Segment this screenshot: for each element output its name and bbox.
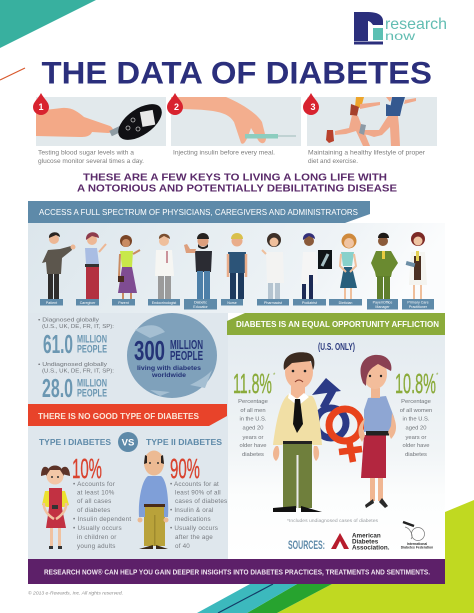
person: nurse — [228, 233, 246, 299]
person: primary care practitioner — [406, 232, 427, 299]
illustration: girl — [41, 466, 70, 549]
person: diabetes educator — [184, 233, 212, 299]
globe: 300 million people: worldwide — [151, 372, 187, 379]
subheading: A NOTORIOUS AND POTENTIALLY DEBILITATING DISEASE — [77, 183, 397, 195]
stat: diagnosed globally: 61.0 — [43, 329, 73, 359]
stat: men: years or — [243, 435, 264, 441]
heading: type I: TYPE I DIABETES — [39, 438, 112, 447]
stat: women: Percentage — [401, 399, 431, 405]
stat: women: aged 20 — [406, 426, 426, 432]
people row — [40, 232, 434, 310]
copyright: © 2013 e-Rewards, Inc. All rights reserved. — [28, 590, 123, 596]
step captions: Testing blood sugar levels with a — [38, 150, 135, 156]
stat: type I 10%: • Insulin dependent — [73, 516, 131, 523]
step captions: Injecting insulin before every meal. — [173, 150, 275, 156]
icon: number drop 2: 2 — [174, 102, 179, 112]
logo: research now: now — [385, 29, 415, 43]
globe: 300 million people: MILLION — [170, 338, 203, 352]
illustration: older man — [138, 450, 168, 549]
stat: type I 10%: in children or — [77, 534, 117, 541]
stat: women: older have — [402, 443, 430, 449]
person: payer office manager — [371, 233, 398, 299]
footnote: *Includes undiagnosed cases of diabetes — [287, 518, 378, 523]
globe: 300 million people: PEOPLE — [170, 349, 203, 363]
stat: diagnosed globally: (U.S., UK, DE, FR, IT, SP): — [42, 324, 114, 330]
stat: men: older have — [239, 443, 267, 449]
stat: undiagnosed globally — [38, 362, 114, 403]
role labels: Endocrinologist — [152, 301, 176, 305]
logo: American Diabetes Association: American — [352, 532, 381, 540]
person: dietician — [340, 234, 357, 299]
person: pharmacist — [262, 233, 284, 299]
role labels: Pharmacist — [264, 301, 282, 305]
stat: women: in the U.S. — [402, 416, 430, 422]
stat: diagnosed globally: MILLION — [77, 334, 107, 346]
icon: runners — [326, 97, 416, 146]
stat: type I 10%: of diabetes — [77, 507, 111, 514]
stat: type I 10% — [72, 453, 131, 550]
panel: step 2 insulin injection — [167, 93, 301, 146]
icon: syringe — [245, 134, 296, 138]
stat: type I 10%: young adults — [77, 543, 116, 550]
illustration: woman — [358, 355, 396, 508]
stat: diagnosed globally — [38, 318, 114, 359]
stat: men: diabetes — [242, 452, 264, 458]
stat: type I 10%: • Accounts for — [73, 481, 115, 488]
icon: versus badge: VS — [122, 438, 134, 448]
stat: men: of all men — [240, 408, 266, 414]
stat: women — [395, 368, 439, 458]
stat: type II 90%: • Accounts for at — [170, 481, 219, 488]
subheading: THESE ARE A FEW KEYS TO LIVING A LONG LIFE WITH — [83, 172, 387, 184]
stat: women: 10.8% — [395, 368, 436, 399]
globe: 300 million people — [127, 313, 217, 398]
stat: undiagnosed globally: 28.0 — [42, 373, 73, 403]
step captions: glucose monitor several times a day. — [38, 159, 144, 165]
role labels — [40, 299, 434, 310]
banner: access a full spectrum: ACCESS A FULL SPECTRUM OF PHYSICIANS, CAREGIVERS AND ADMINISTRATORS — [39, 207, 358, 217]
stat: undiagnosed globally: MILLION — [77, 378, 107, 390]
icon: arm and hand — [171, 97, 266, 144]
stat: undiagnosed globally: • Undiagnosed globally — [38, 362, 107, 368]
stat: type I 10%: • Usually occurs — [73, 525, 122, 532]
subheading — [77, 172, 397, 195]
logo: American Diabetes Association: Diabetes — [352, 538, 379, 546]
stat: women: diabetes — [405, 452, 427, 458]
role labels: Primary Care — [407, 301, 429, 305]
stat: type II 90%: of 40 — [175, 543, 190, 550]
stat: women: * — [436, 373, 439, 379]
logo: International Diabetes Federation: International — [407, 542, 427, 546]
stat: type I 10%: 10% — [72, 453, 102, 484]
logo: American Diabetes Association: Association. — [352, 544, 390, 552]
stat: women: years or — [406, 435, 427, 441]
logo: International Diabetes Federation: Diabetes Federation — [401, 546, 433, 550]
banner: no good type of diabetes: THERE IS NO GOOD TYPE OF DIABETES — [38, 412, 200, 421]
stat: type II 90% — [170, 453, 227, 550]
stat: type I 10%: at least 10% — [77, 490, 115, 496]
title: THE DATA OF DIABETES — [42, 54, 432, 90]
stat: undiagnosed globally: (U.S., UK, DE, FR, IT, SP): — [42, 368, 114, 374]
role labels: Podiatrist — [302, 301, 317, 305]
globe: 300 million people: living with diabetes — [137, 365, 202, 372]
person: parent — [118, 235, 140, 299]
logo: International Diabetes Federation — [401, 522, 433, 550]
panel backgrounds — [28, 223, 445, 559]
role labels: Caregiver — [80, 301, 96, 305]
banner: access a full spectrum — [28, 201, 370, 223]
logo: American Diabetes Association — [331, 532, 390, 552]
stat: type II 90%: least 90% of all — [175, 490, 221, 496]
banner: equal opportunity affliction: DIABETES IS AN EQUAL OPPORTUNITY AFFLICTION — [236, 320, 439, 329]
panel: step 3 exercise — [303, 93, 437, 146]
heading: U.S. only: (U.S. ONLY) — [318, 342, 355, 353]
sources: SOURCES: — [288, 540, 325, 552]
step captions: Maintaining a healthy lifestyle of proper — [308, 150, 425, 156]
banner: research now call to action — [28, 559, 445, 584]
role labels: Patient — [46, 301, 57, 305]
stat: type II 90%: • Usually occurs — [170, 525, 218, 532]
stat: undiagnosed globally: PEOPLE — [77, 388, 107, 400]
stat: diagnosed globally: • Diagnosed globally — [38, 318, 99, 324]
role labels: Manager — [375, 305, 390, 309]
globe: 300 million people: 300 — [134, 335, 165, 366]
person: patient — [42, 232, 76, 299]
role labels: Dietician — [339, 301, 352, 305]
role labels: Payer/Office — [373, 301, 392, 305]
heading: type II: TYPE II DIABETES — [146, 438, 223, 447]
banner: research now call to action: RESEARCH NOW® CAN HELP YOU GAIN DEEPER INSIGHTS INTO DIABETES PRACTICES, TREATMENTS AND SENTIMENTS. — [44, 568, 430, 576]
icon: number drop 1: 1 — [38, 102, 44, 112]
logo: research now: research — [385, 16, 447, 33]
icon: versus badge — [118, 432, 138, 452]
stat: men: in the U.S. — [239, 416, 267, 422]
step captions: diet and exercise. — [308, 159, 358, 165]
icon: glucose meter — [109, 97, 168, 147]
stat: type II 90%: • Insulin & oral — [170, 507, 214, 514]
person: endocrinologist — [155, 234, 174, 299]
stat: men: Percentage — [238, 399, 268, 405]
icon: hand with finger — [36, 108, 113, 137]
role labels: Diabetic — [194, 301, 207, 305]
panel: step 1 glucose test — [33, 93, 168, 147]
icon: male and female symbols — [312, 378, 362, 462]
stat: women: of all women — [400, 408, 432, 414]
sources — [288, 522, 433, 552]
icon: number drop 3: 3 — [310, 102, 316, 112]
stat: diagnosed globally: PEOPLE — [77, 344, 107, 356]
person: podiatrist — [301, 233, 332, 299]
stat: men: * — [273, 373, 276, 379]
banner: equal opportunity affliction — [227, 313, 445, 335]
step captions — [38, 150, 425, 165]
role labels: Practitioner — [409, 305, 428, 309]
role labels: Educator — [193, 305, 208, 309]
stat: type II 90%: cases of diabetes — [175, 498, 227, 505]
banner: no good type of diabetes — [28, 404, 227, 426]
stat: type II 90%: after the age — [175, 534, 213, 541]
person: caregiver — [85, 232, 106, 299]
role labels: Nurse — [227, 301, 237, 305]
stat: men: aged 20 — [243, 426, 263, 432]
stat: type I 10%: of all cases — [77, 498, 112, 505]
stat: type II 90%: 90% — [170, 453, 200, 484]
stat: type II 90%: medications — [175, 516, 211, 523]
stat: men: 11.8% — [233, 368, 272, 399]
stat: men — [233, 368, 276, 458]
illustration: man — [273, 352, 322, 512]
role labels: Parent — [118, 301, 129, 305]
logo: research now — [354, 12, 447, 44]
